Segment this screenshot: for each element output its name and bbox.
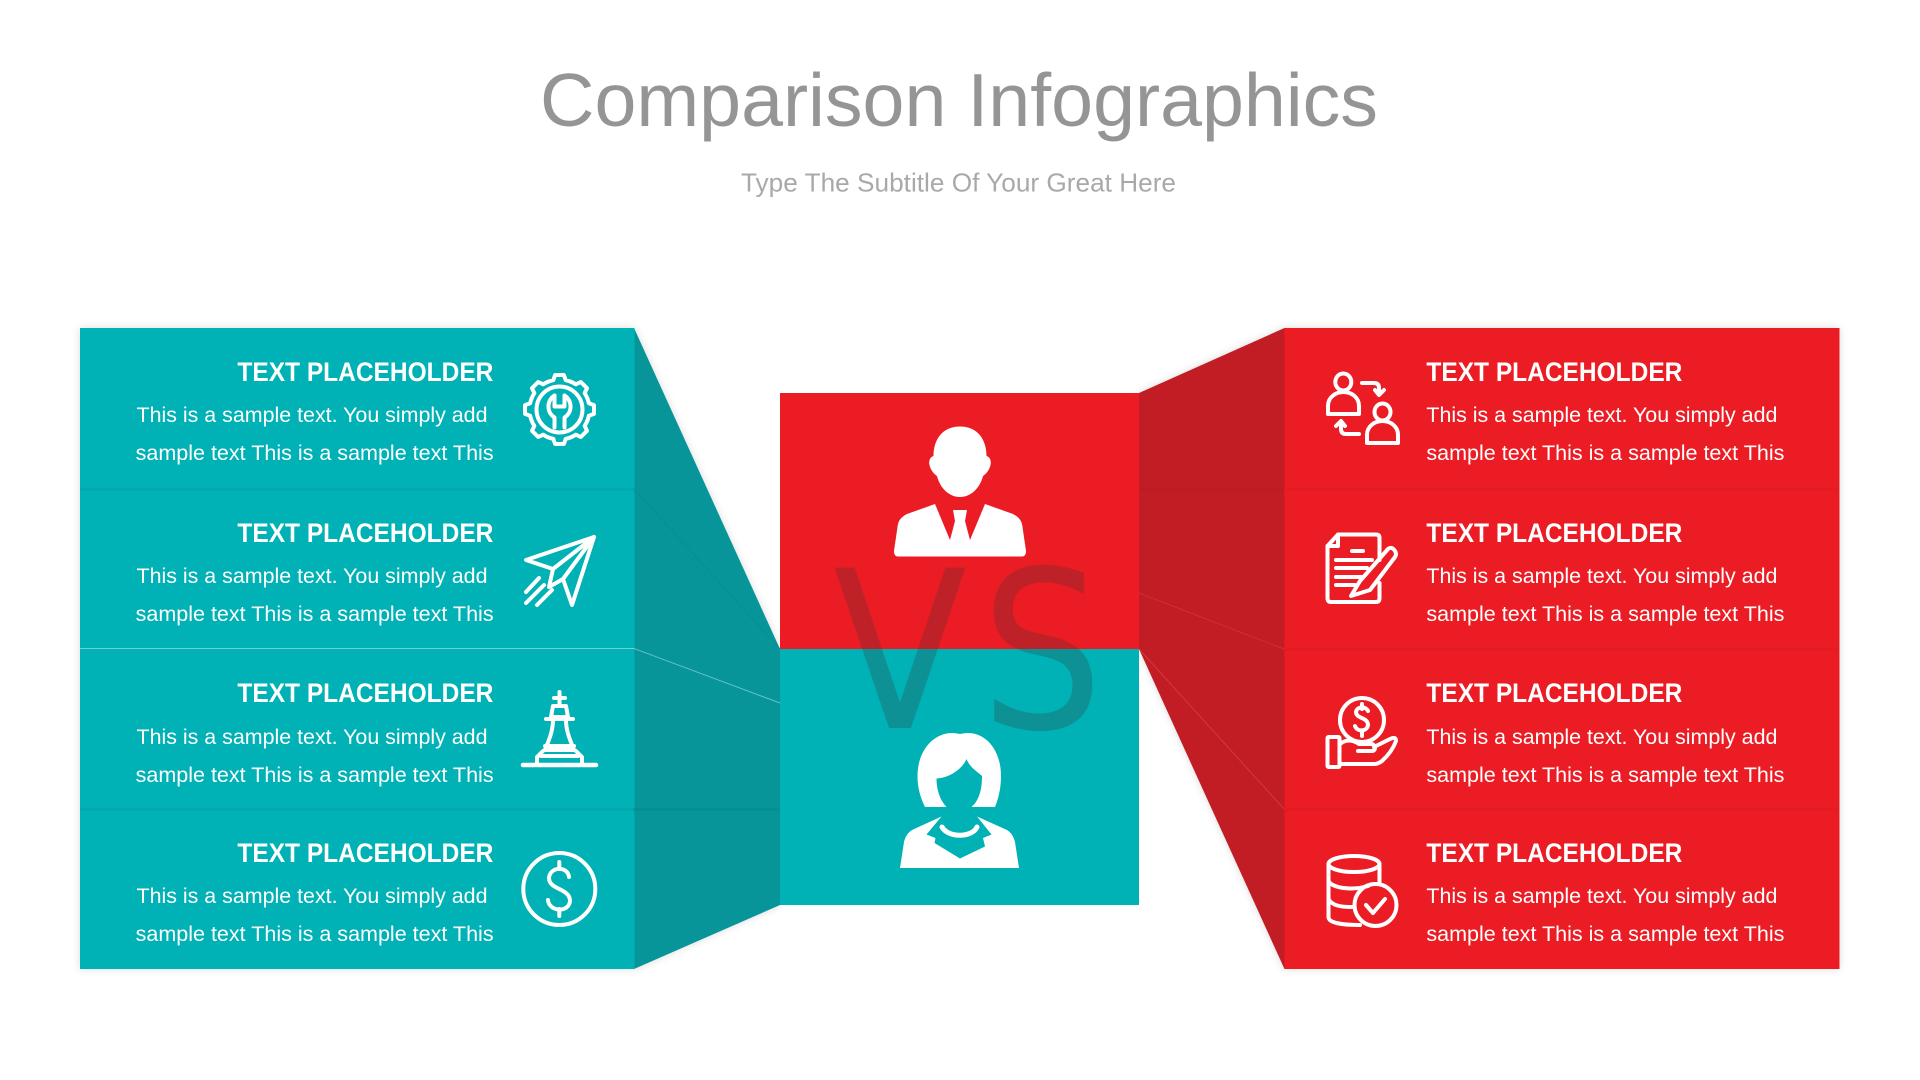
right row 2	[1328, 518, 1784, 626]
right row 1	[1328, 357, 1784, 465]
body text	[136, 885, 494, 946]
icon: chess king	[523, 692, 596, 765]
body text: This is a sample text. You simply add	[136, 404, 488, 427]
body text: sample text This is a sample text This	[1426, 603, 1784, 626]
body text: sample text This is a sample text This	[136, 923, 494, 946]
body text: sample text This is a sample text This	[136, 442, 494, 465]
title: Comparison Infographics	[540, 58, 1378, 142]
VS watermark: S	[981, 524, 1103, 780]
body text: sample text This is a sample text This	[136, 603, 494, 626]
left row 2	[136, 518, 594, 626]
teal block	[780, 649, 1139, 905]
right row 4	[1328, 838, 1784, 946]
heading: TEXT PLACEHOLDER	[237, 838, 493, 868]
panel: right side	[1139, 328, 1840, 969]
body text	[136, 726, 494, 787]
body text	[1426, 565, 1784, 626]
body text: sample text This is a sample text This	[1426, 764, 1784, 787]
right row 3	[1328, 678, 1784, 787]
heading: TEXT PLACEHOLDER	[237, 678, 493, 708]
VS watermark: V	[833, 524, 967, 780]
body text: This is a sample text. You simply add	[1426, 404, 1777, 427]
icon: woman	[900, 733, 1019, 868]
left row 3	[136, 678, 596, 787]
body text: sample text This is a sample text This	[136, 764, 494, 787]
body text: This is a sample text. You simply add	[1426, 565, 1777, 588]
left row 4	[136, 838, 595, 946]
body text: This is a sample text. You simply add	[1426, 726, 1777, 749]
heading: TEXT PLACEHOLDER	[237, 518, 493, 548]
body text: This is a sample text. You simply add	[136, 726, 488, 749]
heading: TEXT PLACEHOLDER	[1426, 838, 1682, 868]
body text: This is a sample text. You simply add	[136, 565, 488, 588]
icon: dollar coin	[523, 853, 595, 925]
panel: left side	[80, 328, 780, 969]
heading: TEXT PLACEHOLDER	[1426, 678, 1682, 708]
body text	[136, 565, 494, 626]
body text: sample text This is a sample text This	[1426, 923, 1784, 946]
right fold shape	[1139, 328, 1840, 969]
heading: TEXT PLACEHOLDER	[1426, 518, 1682, 548]
body text	[1426, 885, 1784, 946]
left fold shape	[80, 328, 780, 969]
icon: paper plane	[526, 537, 594, 605]
body text: This is a sample text. You simply add	[136, 885, 488, 908]
icon: database with check	[1328, 856, 1396, 926]
icon: hand holding coin	[1328, 698, 1396, 767]
body text: sample text This is a sample text This	[1426, 442, 1784, 465]
body text: This is a sample text. You simply add	[1426, 885, 1777, 908]
icon: man	[894, 426, 1026, 556]
body text	[1426, 404, 1784, 465]
body text	[136, 404, 494, 465]
icon: gear with wrench	[525, 375, 594, 444]
heading: TEXT PLACEHOLDER	[1426, 357, 1682, 387]
heading: TEXT PLACEHOLDER	[237, 357, 493, 387]
VS watermark	[833, 524, 1103, 780]
body text	[1426, 726, 1784, 787]
red block	[780, 393, 1139, 649]
icon: people exchange	[1328, 374, 1398, 443]
panel: center comparison	[780, 393, 1139, 905]
left row 1	[136, 357, 594, 465]
subtitle: Type The Subtitle Of Your Great Here	[741, 168, 1176, 198]
icon: document and pencil	[1328, 534, 1396, 602]
